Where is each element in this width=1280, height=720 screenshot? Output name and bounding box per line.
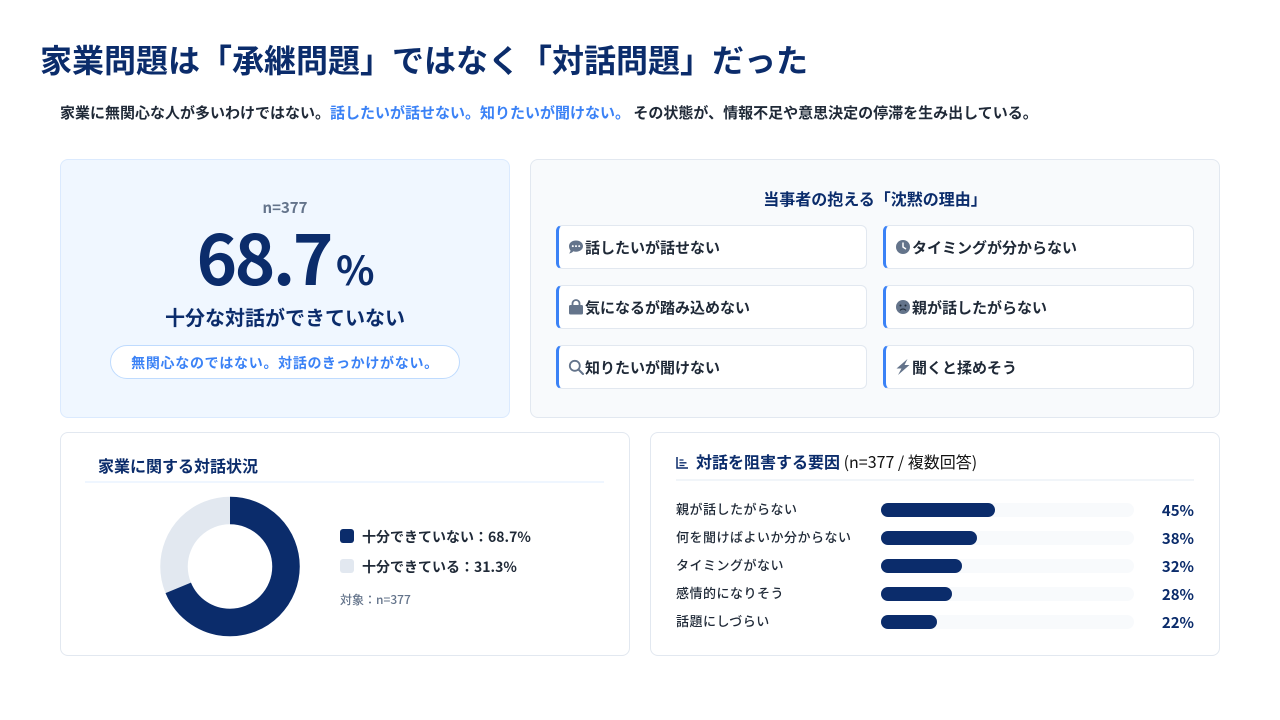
reason: speech: 話したいが話せない [585,237,720,258]
icon: lightning bolt [896,359,910,375]
reason: hesitation [556,285,867,329]
bar: emotional: 28% [1162,584,1194,605]
bar: parents reluctant: 親が話したがらない [676,499,798,518]
bar chart [676,499,1194,633]
panel heading: 当事者の抱える「沈黙の理由」 [763,186,987,210]
legend swatch: not enough [340,529,354,543]
panel: dialogue status [60,432,630,656]
bar: parents reluctant: 45% [1162,500,1194,521]
reason: conflict [883,345,1194,389]
reason: timing [883,225,1194,269]
bar: emotional: 感情的になりそう [676,583,784,602]
reason: parent reluctance [883,285,1194,329]
bar: no timing [676,555,1194,577]
panel heading: 対話を阻害する要因 (n=377 / 複数回答) [696,449,977,473]
legend swatch: enough [340,559,354,573]
icon: chart [676,457,688,469]
bar: hard to raise: 話題にしづらい [676,611,770,630]
bar: unknown what to ask: 何を聞けばよいか分からない [676,527,852,546]
callout pill [110,345,460,379]
legend [340,527,531,608]
reason: speech [556,225,867,269]
statistic caption: 十分な対話ができていない [165,302,405,331]
donut chart [160,496,300,636]
bar: hard to raise [676,611,1194,633]
bar: unknown what to ask [676,527,1194,549]
icon: lock [569,299,583,314]
big number: 68.7% [196,205,374,305]
panel: obstacles to dialogue [650,432,1220,656]
bar: emotional [676,583,1194,605]
legend label: enough: 十分できている：31.3% [362,557,517,577]
callout pill: 無関心なのではない。対話のきっかけがない。 [131,353,439,373]
bar: unknown what to ask: 38% [1162,528,1194,549]
icon: sad face [896,300,910,314]
heading rule [85,481,604,483]
reason: cannot ask: 知りたいが聞けない [585,357,720,378]
subtitle: 家業に無関心な人が多いわけではない。話したいが話せない。知りたいが聞けない。 その状態が、情報不足や意思決定の停滞を生み出している。 [60,102,1038,123]
icon: speech bubble [569,240,583,254]
bar: no timing: タイミングがない [676,555,784,574]
panel: reasons for silence [530,159,1220,418]
reason: cannot ask [556,345,867,389]
bar: hard to raise: 22% [1162,612,1194,633]
reason: timing: タイミングが分からない [912,237,1077,258]
heading rule [676,479,1194,481]
legend label: not enough: 十分できていない：68.7% [362,527,531,547]
panel heading: 家業に関する対話状況 [98,453,258,477]
reason: parent reluctance: 親が話したがらない [912,297,1047,318]
legend note: 対象：n=377 [340,591,411,608]
reason: conflict: 聞くと揉めそう [912,357,1017,378]
icon: magnifier [568,360,584,375]
title: 家業問題は「承継問題」ではなく「対話問題」だった [40,36,808,82]
reason: hesitation: 気になるが踏み込めない [585,297,750,318]
sample size: n=377 [262,197,308,218]
icon: clock [896,240,910,254]
bar: no timing: 32% [1162,556,1194,577]
panel: key statistic [60,159,510,418]
bar: parents reluctant [676,499,1194,521]
